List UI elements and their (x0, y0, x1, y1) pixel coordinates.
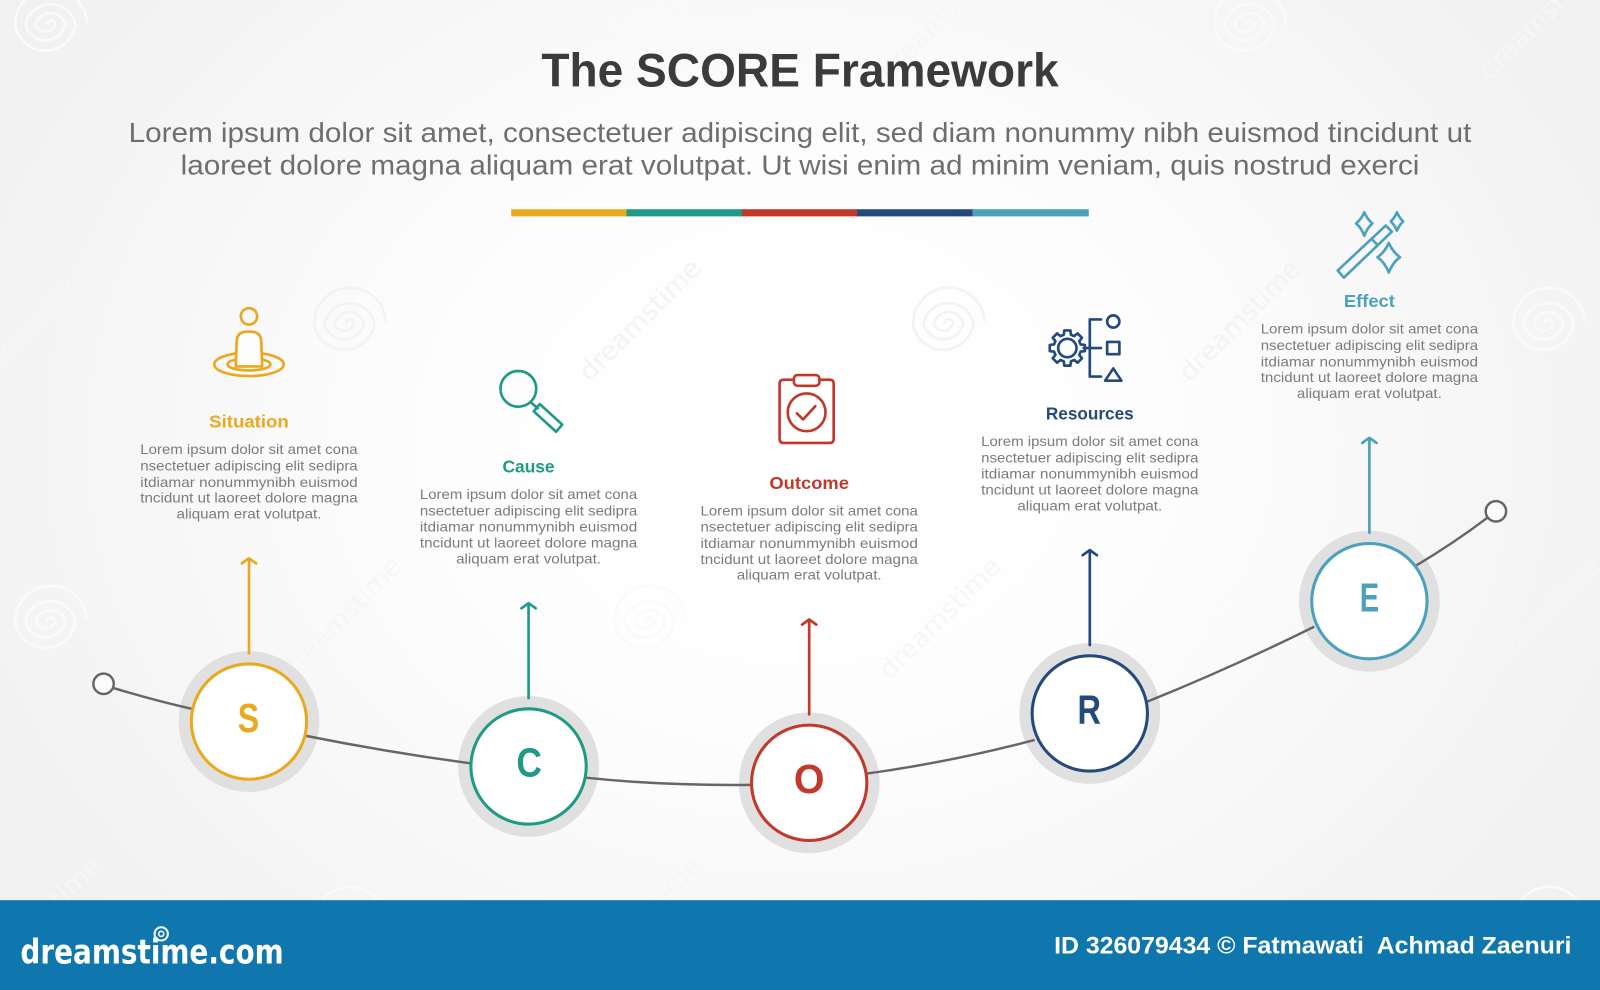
text block: Resources: nsectetuer adipiscing elit sedipra (981, 449, 1199, 465)
arrow: Outcome (802, 620, 816, 714)
text block: Cause: aliquam erat volutpat. (456, 550, 601, 566)
footer credit: ID 326079434 © Fatmawati Achmad Zaenuri (1054, 932, 1571, 959)
panel: Situation (140, 308, 358, 779)
panel: Outcome (701, 375, 918, 840)
text block: Effect: aliquam erat volutpat. (1297, 385, 1442, 401)
subtitle: Lorem ipsum dolor sit amet, consectetuer adipiscing elit, sed diam nonummy nibh euismod tincidunt ut (129, 117, 1472, 148)
text block: Cause: itdiamar nonummynibh euismod (420, 519, 637, 535)
timeline start node (93, 674, 114, 694)
text block: Outcome: tncidunt ut laoreet dolore magna (701, 551, 918, 567)
timeline curve (113, 517, 1488, 785)
text block: Situation: Lorem ipsum dolor sit amet cona (140, 441, 358, 457)
text block: Effect: nsectetuer adipiscing elit sedipra (1261, 337, 1478, 353)
heading: Outcome: Outcome (769, 473, 849, 493)
text block: Situation: tncidunt ut laoreet dolore magna (140, 490, 358, 506)
text block: Cause: Lorem ipsum dolor sit amet cona (420, 486, 638, 502)
text block: Situation: aliquam erat volutpat. (177, 505, 321, 521)
circle: S: S (238, 695, 259, 741)
panel: Cause (420, 371, 638, 824)
footer logo: dreamstime.com (20, 932, 284, 971)
arrow: Resources (1083, 550, 1097, 645)
arrow: Situation (242, 558, 256, 653)
circle: S (191, 664, 307, 779)
footer banner (0, 900, 1600, 990)
heading: Resources: Resources (1046, 403, 1134, 423)
text block: Resources: aliquam erat volutpat. (1017, 497, 1162, 513)
title: The SCORE Framework (541, 45, 1060, 97)
text block: Resources (981, 433, 1199, 513)
panel: Effect (1261, 212, 1478, 659)
text block: Outcome: nsectetuer adipiscing elit sedipra (701, 519, 918, 535)
heading: Situation: Situation (209, 412, 289, 432)
icon: person in ring (214, 308, 284, 376)
icon: magic wand with sparkles (1338, 212, 1403, 278)
text block: Resources: itdiamar nonummynibh euismod (981, 466, 1198, 482)
colored divider bar (511, 209, 1089, 216)
subtitle (129, 117, 1472, 181)
text block: Outcome: aliquam erat volutpat. (737, 567, 882, 583)
text block: Effect: itdiamar nonummynibh euismod (1261, 353, 1478, 369)
watermark pattern: dreamstime (873, 551, 1007, 686)
text block: Outcome: itdiamar nonummynibh euismod (701, 535, 918, 551)
text block: Cause: tncidunt ut laoreet dolore magna (420, 535, 638, 551)
text block: Situation: itdiamar nonummynibh euismod (140, 474, 358, 490)
circle: R: R (1078, 687, 1101, 733)
heading: Effect: Effect (1344, 291, 1395, 311)
circle: R (1032, 656, 1147, 771)
timeline end node (1486, 501, 1506, 522)
text block: Effect: Lorem ipsum dolor sit amet cona (1261, 321, 1478, 337)
circle: O (752, 725, 867, 840)
circle: O: O (794, 756, 824, 802)
subtitle: laoreet dolore magna aliquam erat volutpat. Ut wisi enim ad minim veniam, quis nostrud exerci (181, 150, 1419, 181)
arrow: Effect (1362, 438, 1377, 533)
text block: Situation (140, 441, 358, 521)
circle: E (1312, 543, 1427, 659)
circle: C: C (516, 740, 542, 786)
watermark pattern: dreamstime (573, 850, 707, 985)
text block: Situation: nsectetuer adipiscing elit sedipra (140, 458, 358, 474)
text block: Outcome (701, 502, 918, 583)
arrow: Cause (521, 603, 536, 698)
text block: Resources: tncidunt ut laoreet dolore magna (981, 481, 1199, 497)
text block: Effect (1261, 321, 1478, 401)
watermark pattern: dreamstime (274, 551, 408, 686)
heading: Cause: Cause (503, 457, 555, 477)
icon: gear with shapes (1050, 315, 1121, 381)
text block: Effect: tncidunt ut laoreet dolore magna (1261, 369, 1478, 385)
watermark pattern: dreamstime (1173, 253, 1307, 388)
panel: Resources (981, 315, 1199, 771)
circle: E: E (1360, 574, 1379, 620)
grey rings behind circles (179, 531, 1440, 853)
watermark pattern: dreamstime (573, 253, 707, 388)
text block: Cause (420, 486, 638, 566)
icon: clipboard with check (780, 375, 834, 443)
text block: Resources: Lorem ipsum dolor sit amet cona (981, 433, 1199, 449)
circle: C (471, 709, 586, 824)
icon: magnifying glass (501, 371, 562, 432)
text block: Cause: nsectetuer adipiscing elit sedipra (420, 502, 638, 518)
watermark pattern: dreamstime (1173, 850, 1307, 985)
text block: Outcome: Lorem ipsum dolor sit amet cona (701, 502, 918, 518)
